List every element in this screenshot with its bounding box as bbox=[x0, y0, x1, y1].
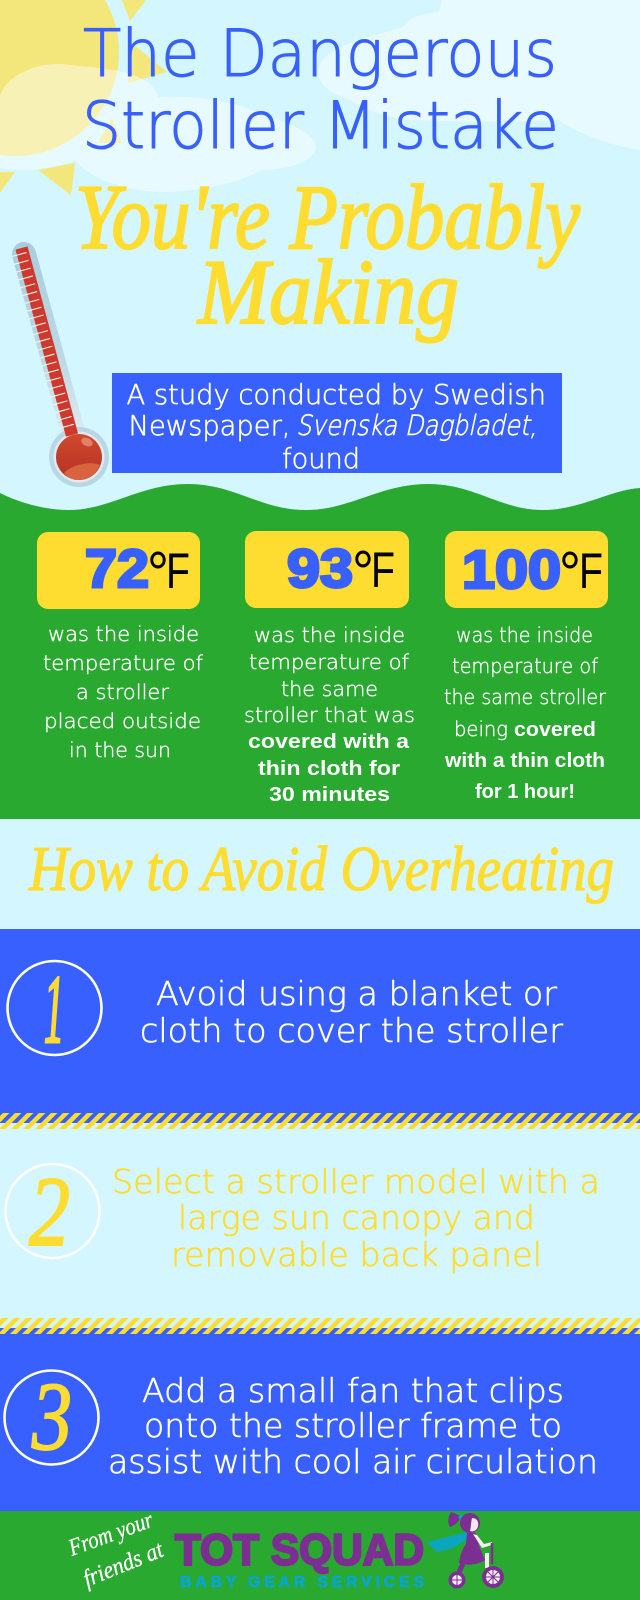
step 2 text: large sun canopy and bbox=[178, 1198, 535, 1237]
step 3 text: Add a small fan that clips bbox=[142, 1371, 564, 1410]
description: the same stroller bbox=[444, 685, 607, 709]
step 2 number badge bbox=[6, 1156, 100, 1267]
description: thin cloth for bbox=[258, 758, 400, 780]
description bbox=[444, 623, 607, 803]
step 3 text bbox=[108, 1371, 598, 1481]
step 3 panel bbox=[0, 1334, 640, 1511]
icon: sun bbox=[0, 0, 167, 195]
step 3 number badge: 3 bbox=[31, 1363, 72, 1471]
value: 72 bbox=[85, 539, 149, 599]
badge bbox=[245, 531, 409, 608]
description: was the inside bbox=[254, 623, 405, 647]
stat column: 100F bbox=[444, 531, 608, 803]
description: was the inside bbox=[456, 623, 593, 647]
green wave panel bbox=[0, 484, 640, 819]
description: a stroller bbox=[76, 680, 170, 704]
step 1 number badge: 1 bbox=[44, 956, 64, 1063]
description: covered with a bbox=[248, 731, 410, 753]
description: for 1 hour! bbox=[475, 781, 575, 803]
description: temperature of bbox=[249, 650, 409, 674]
logo wordmark: TOT SQUAD bbox=[175, 1526, 424, 1574]
callout newspaper name: Svenska Dagbladet, bbox=[296, 409, 537, 442]
description: stroller that was bbox=[244, 703, 415, 727]
value: 100 bbox=[462, 540, 561, 600]
description: the same bbox=[281, 677, 378, 701]
title line 2: Stroller Mistake bbox=[82, 89, 559, 164]
callout line 1: A study conducted by Swedish bbox=[126, 378, 546, 411]
unit: F bbox=[371, 542, 395, 598]
title bbox=[82, 17, 559, 164]
step 2 text: removable back panel bbox=[171, 1235, 542, 1274]
logo icon: girl on tricycle bbox=[427, 1512, 504, 1588]
unit: ° bbox=[352, 539, 374, 606]
subtitle line 2: Making bbox=[196, 241, 459, 343]
unit bbox=[559, 540, 603, 607]
badge bbox=[445, 531, 608, 608]
description: placed outside bbox=[44, 709, 201, 733]
callout line 2: Newspaper, bbox=[128, 409, 290, 442]
description: being bbox=[454, 717, 508, 741]
from your friends at: friends at bbox=[80, 1537, 168, 1593]
striped divider: top bbox=[0, 1113, 640, 1129]
unit: ° bbox=[559, 540, 581, 607]
script subtitle bbox=[75, 166, 580, 343]
study callout box bbox=[112, 373, 562, 475]
clouds bbox=[0, 0, 640, 192]
logo tagline: BABY GEAR SERVICES bbox=[180, 1574, 424, 1591]
step 3 text: assist with cool air circulation bbox=[108, 1442, 598, 1481]
from your friends at bbox=[64, 1507, 168, 1593]
step 1 text: Avoid using a blanket or bbox=[156, 974, 557, 1013]
description bbox=[244, 623, 415, 806]
description: 30 minutes bbox=[269, 784, 390, 806]
step 2 number badge: 2 bbox=[29, 1156, 70, 1267]
description bbox=[43, 622, 203, 762]
footer panel bbox=[0, 1507, 640, 1600]
description: with a thin cloth bbox=[444, 750, 605, 772]
title line 1: The Dangerous bbox=[83, 17, 557, 92]
icon: thermometer bbox=[19, 248, 109, 487]
stat column: 93F bbox=[244, 531, 415, 806]
description: in the sun bbox=[69, 738, 171, 762]
section heading band bbox=[0, 819, 640, 929]
step 1 panel bbox=[0, 929, 640, 1113]
unit: F bbox=[166, 543, 190, 599]
value: 93 bbox=[287, 539, 353, 599]
step 1 number badge bbox=[8, 956, 102, 1063]
sky background bbox=[0, 0, 640, 520]
description: temperature of bbox=[452, 654, 598, 678]
unit bbox=[352, 539, 395, 606]
step 2 text bbox=[112, 1162, 600, 1274]
step 1 text: cloth to cover the stroller bbox=[140, 1011, 563, 1050]
step 3 number badge bbox=[4, 1363, 98, 1471]
unit: ° bbox=[147, 540, 169, 607]
step 3 text: onto the stroller frame to bbox=[144, 1406, 562, 1445]
from your friends at: From your bbox=[64, 1507, 157, 1562]
description: was the inside bbox=[48, 622, 199, 646]
striped divider: bottom bbox=[0, 1318, 640, 1334]
callout line 3: found bbox=[282, 442, 360, 475]
step 2 text: Select a stroller model with a bbox=[112, 1162, 600, 1201]
description: covered bbox=[514, 719, 596, 741]
badge bbox=[37, 532, 200, 609]
description: temperature of bbox=[43, 651, 203, 675]
unit bbox=[147, 540, 190, 607]
unit: F bbox=[579, 543, 603, 599]
step 1 text bbox=[140, 974, 563, 1050]
stat column: 72F bbox=[37, 532, 203, 762]
step 2 panel bbox=[0, 1113, 640, 1334]
